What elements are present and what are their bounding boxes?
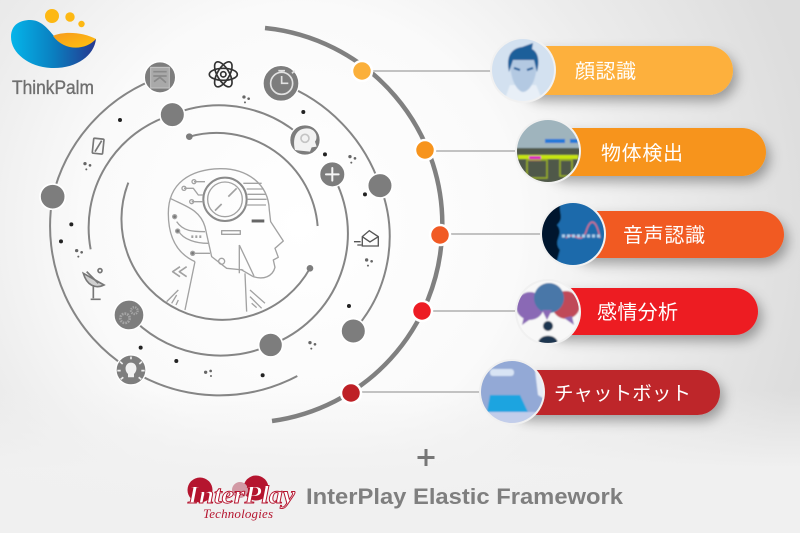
framework title: InterPlay Elastic Framework: [306, 484, 624, 509]
logo: InterPlay Technologies: InterPlay: [187, 482, 296, 509]
AI head line art: [167, 169, 283, 312]
logo: InterPlay Technologies: [187, 476, 296, 521]
item: chatbot: チャットボット: [554, 383, 691, 405]
decorative dots: [59, 110, 367, 377]
logo: ThinkPalm: [11, 9, 96, 99]
item: object detection: [514, 118, 766, 184]
item: speech recognition: 音声認識: [623, 224, 705, 247]
orbit system: [40, 59, 392, 395]
icon: satellite dish: [83, 269, 104, 299]
icon: document node: [144, 62, 176, 93]
item: face recognition: 顔認識: [575, 60, 636, 83]
icon: gears node: [114, 300, 144, 330]
item: speech recognition: [540, 200, 784, 268]
icon: plus node: [320, 162, 345, 187]
item: object detection: 物体検出: [601, 142, 683, 165]
logo: InterPlay Technologies: Technologies: [203, 506, 273, 521]
item: sentiment analysis: 感情分析: [597, 301, 678, 324]
item: sentiment analysis: [514, 278, 758, 346]
logo: ThinkPalm: ThinkPalm: [12, 77, 94, 99]
outer arc: [265, 28, 442, 421]
icon: head node: [290, 125, 320, 155]
item: chatbot: [478, 358, 720, 426]
icon: mail: [354, 231, 378, 246]
plus sign: [418, 449, 434, 466]
plain nodes: [40, 102, 392, 357]
orbit rings: [50, 77, 390, 395]
icon: atom: [209, 59, 237, 89]
icon: stopwatch node: [263, 65, 299, 101]
connector lines: [361, 71, 545, 392]
icon: phone: [92, 138, 104, 154]
icon: light bulb node: [116, 355, 146, 385]
item: face recognition: [488, 36, 733, 104]
timeline dots: [341, 61, 450, 403]
